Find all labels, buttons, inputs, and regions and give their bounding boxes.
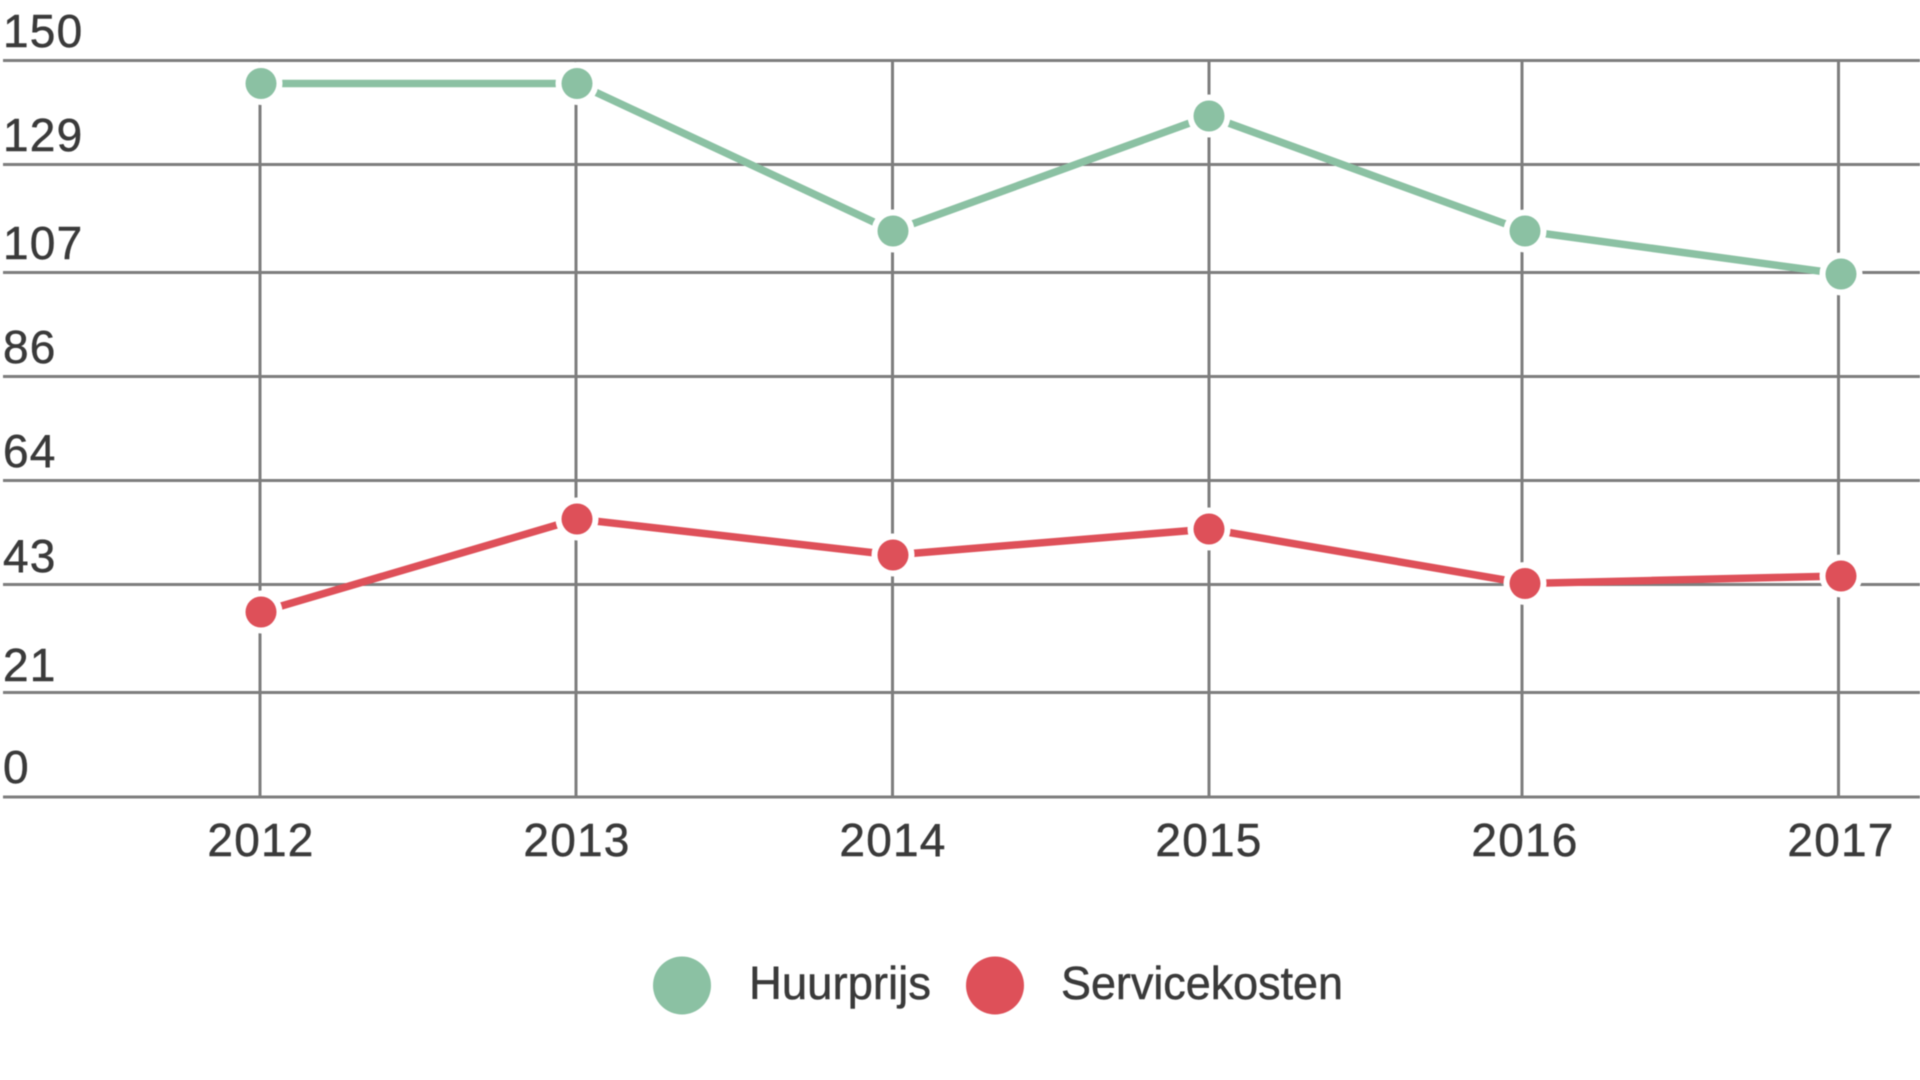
legend — [653, 956, 1343, 1014]
x axis labels: 2016 — [1471, 814, 1579, 866]
series: Servicekosten — [240, 498, 1862, 634]
x axis labels: 2017 — [1787, 814, 1895, 866]
y axis labels: 64 — [3, 425, 57, 477]
y axis labels: 43 — [3, 530, 57, 582]
y axis labels — [3, 5, 83, 793]
x axis labels: 2015 — [1155, 814, 1263, 866]
x axis labels — [207, 814, 1895, 866]
y axis labels: 107 — [3, 217, 83, 269]
y axis labels: 129 — [3, 109, 83, 161]
series: Huurprijs — [240, 62, 1862, 296]
legend: Huurprijs — [749, 957, 931, 1009]
y axis labels: 150 — [3, 5, 83, 57]
x axis labels: 2012 — [207, 814, 315, 866]
y axis labels: 86 — [3, 321, 57, 373]
legend: Servicekosten — [1061, 957, 1343, 1009]
y axis labels: 0 — [3, 741, 30, 793]
x axis labels: 2014 — [839, 814, 947, 866]
x axis labels: 2013 — [523, 814, 631, 866]
y axis labels: 21 — [3, 639, 57, 691]
